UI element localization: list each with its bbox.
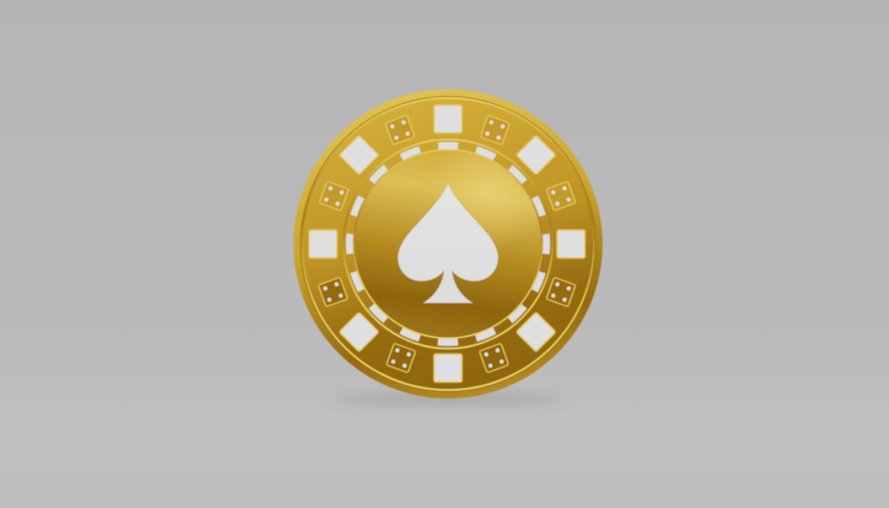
ring face	[303, 99, 593, 389]
die 1	[385, 115, 415, 145]
contact shadow	[333, 394, 563, 404]
die 5	[318, 277, 348, 307]
die 6	[546, 277, 576, 307]
die 8	[479, 343, 509, 373]
die 2	[480, 115, 510, 145]
die 7	[386, 343, 416, 373]
outer rim	[294, 90, 602, 398]
centre disc	[353, 149, 543, 339]
chip	[294, 90, 602, 398]
icon: spade	[398, 184, 498, 303]
white edge ticks	[350, 146, 546, 342]
white squares	[309, 105, 585, 382]
inner groove ring	[344, 140, 552, 348]
die 4	[546, 181, 576, 211]
dice	[318, 115, 576, 373]
die 3	[319, 181, 349, 211]
